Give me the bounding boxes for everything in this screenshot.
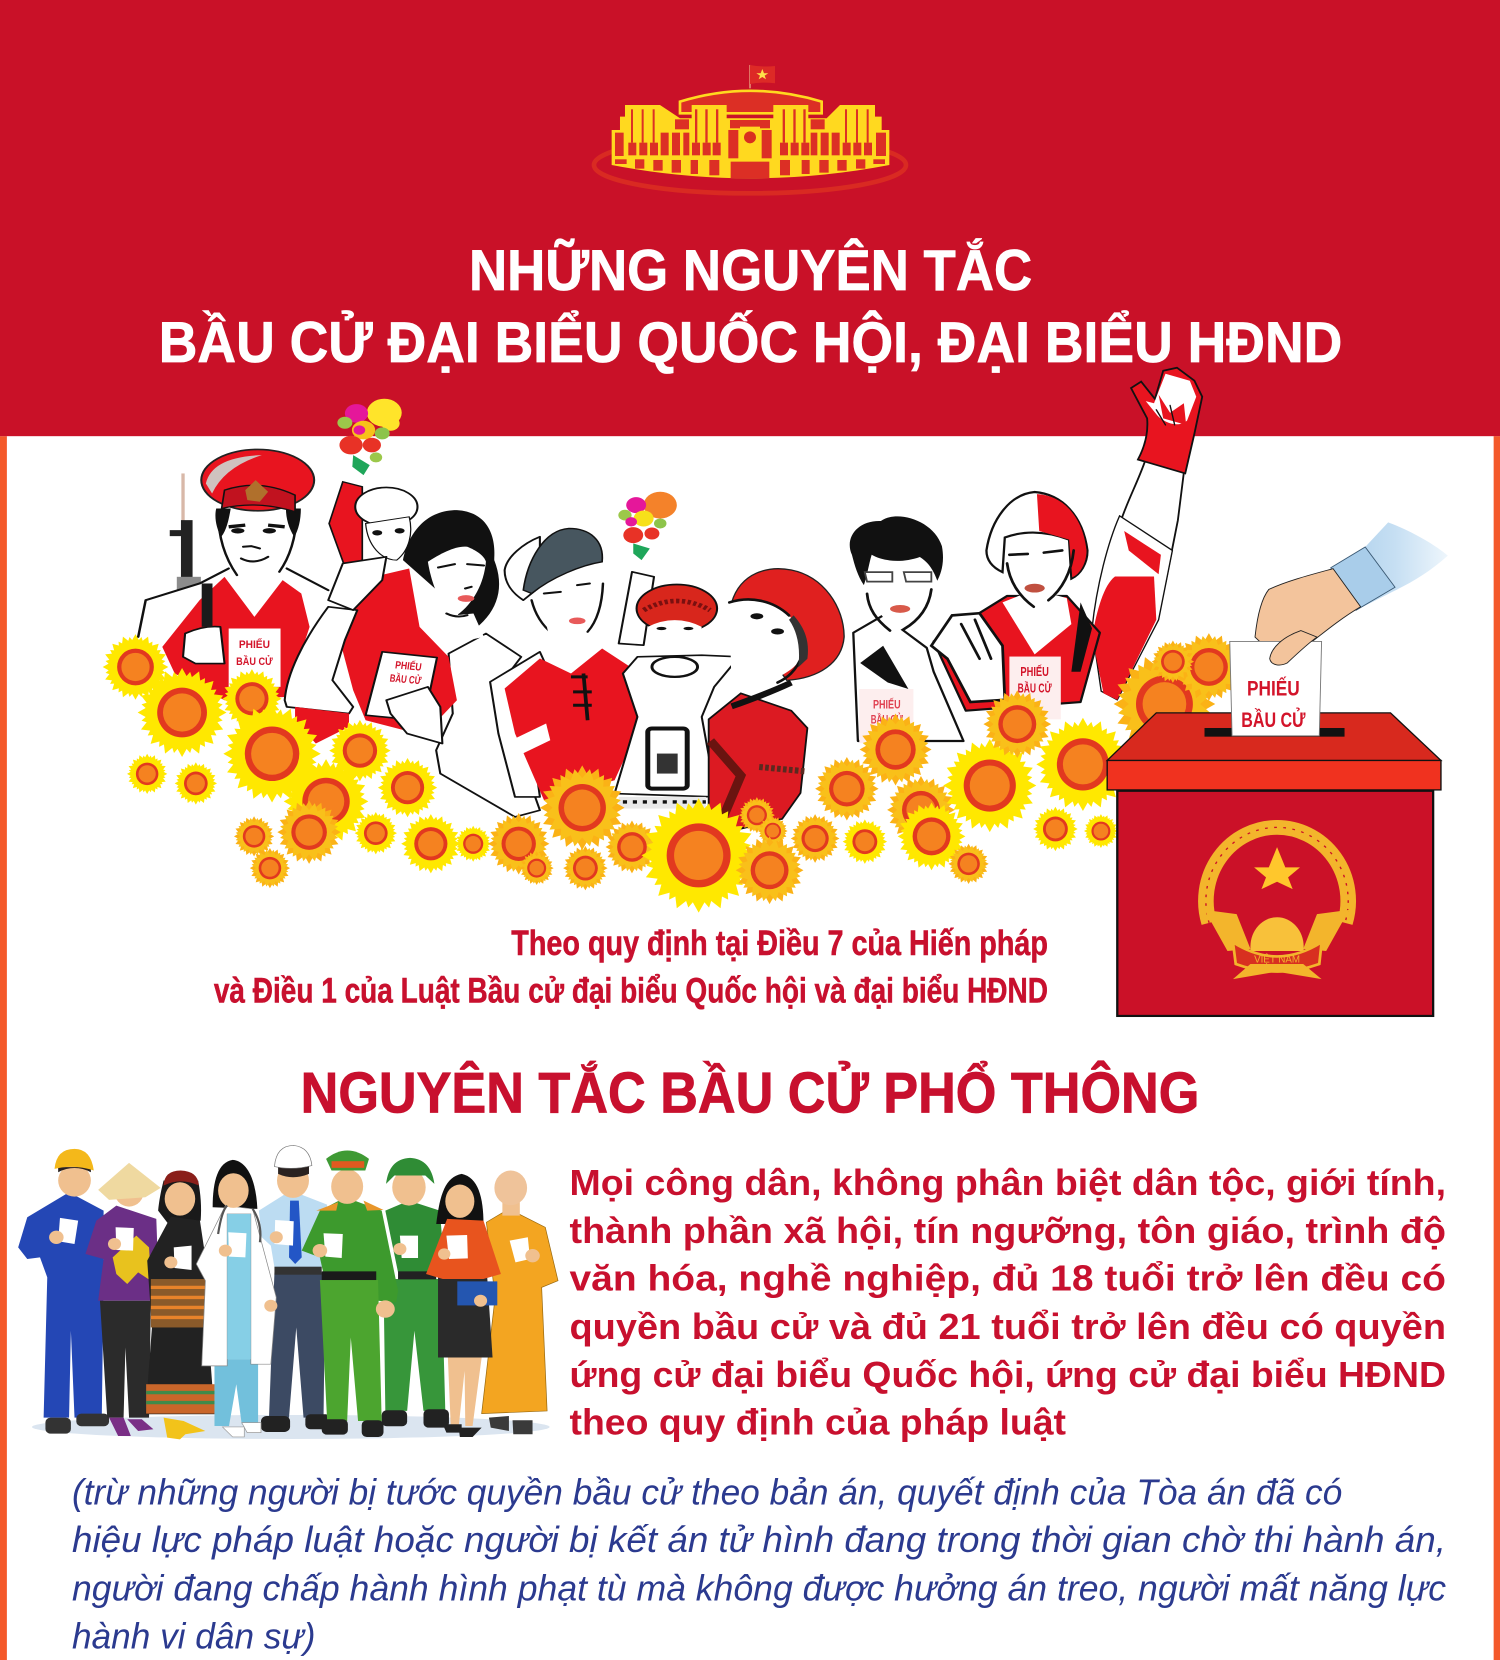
man in grey hat bbox=[490, 528, 637, 800]
note line 4: hành vi dân sự) bbox=[72, 1615, 315, 1656]
bouquet bbox=[618, 492, 677, 560]
hand bbox=[1255, 522, 1448, 641]
line 1: Mọi công dân, không phân biệt dân tộc, giới tính, bbox=[570, 1162, 1446, 1203]
woman carrying child: PHIẾU bbox=[394, 658, 423, 673]
title bbox=[159, 238, 1342, 375]
line 6: theo quy định của pháp luật bbox=[570, 1402, 1066, 1443]
soldier bbox=[138, 449, 328, 700]
header band bbox=[0, 0, 1500, 436]
principle description bbox=[570, 1162, 1446, 1443]
illustration: nine citizens from different occupations bbox=[18, 1145, 558, 1439]
woman carrying child bbox=[285, 482, 540, 817]
illustration: raised glove bbox=[1131, 368, 1202, 473]
icon: National Assembly building logo bbox=[594, 65, 906, 193]
subtitle line 1: Theo quy định tại Điều 7 của Hiến pháp bbox=[511, 924, 1048, 963]
man with glasses bbox=[850, 516, 963, 743]
child in red headscarf bbox=[615, 572, 739, 809]
woman in orange shirt bbox=[426, 1174, 501, 1437]
icon: national emblem: VIỆT NAM bbox=[1254, 953, 1300, 966]
worker in helmet raising hand: BẦU CỬ bbox=[1018, 681, 1052, 695]
bouquet bbox=[337, 399, 402, 475]
title line 1: NHỮNG NGUYÊN TẮC bbox=[469, 238, 1032, 303]
note line 1: (trừ những người bị tước quyền bầu cử theo bản án, quyết định của Tòa án đã có bbox=[72, 1471, 1342, 1512]
subtitle line 2: và Điều 1 của Luật Bầu cử đại biểu Quốc hội và đại biểu HĐND bbox=[214, 972, 1048, 1011]
box body bbox=[1117, 791, 1433, 1016]
line 2: thành phần xã hội, tín ngưỡng, tôn giáo, trình độ bbox=[570, 1210, 1446, 1251]
monk bbox=[482, 1171, 558, 1434]
woman in ethnic costume bbox=[145, 1171, 214, 1439]
thumb bbox=[1270, 631, 1317, 665]
exception note bbox=[72, 1471, 1446, 1656]
icon: national emblem bbox=[1205, 827, 1349, 979]
icon: flag bbox=[750, 65, 775, 88]
officer's colleague: soldier bbox=[382, 1158, 449, 1428]
line 5: ứng cử đại biểu Quốc hội, ứng cử đại biểu HĐND bbox=[570, 1354, 1446, 1395]
man with glasses: BẦU CỬ bbox=[871, 712, 903, 727]
engineer bbox=[259, 1145, 331, 1432]
child on shoulders bbox=[329, 482, 457, 735]
ballot box and voting hand bbox=[1107, 522, 1448, 1016]
section heading: NGUYÊN TẮC BẦU CỬ PHỔ THÔNG bbox=[301, 1061, 1199, 1126]
ballot paper: PHIẾU bbox=[1247, 676, 1300, 700]
note line 2: hiệu lực pháp luật hoặc người bị kết án tử hình đang trong thời gian chờ thi hành án, bbox=[72, 1519, 1446, 1560]
illustration: citizens, left group bbox=[138, 399, 739, 817]
officer bbox=[302, 1150, 398, 1437]
worker in helmet raising hand: PHIẾU bbox=[1020, 664, 1049, 679]
doctor bbox=[196, 1160, 277, 1437]
worker in helmet raising hand bbox=[931, 462, 1184, 719]
soldier: BẦU CỬ bbox=[236, 655, 273, 668]
illustration: citizens, right group bbox=[709, 462, 1184, 836]
woman carrying child: BẦU CỬ bbox=[389, 671, 422, 687]
sunflowers bbox=[100, 630, 1246, 918]
ground shadow bbox=[32, 1415, 550, 1439]
worker in blue bbox=[18, 1149, 109, 1434]
right orange border bbox=[1494, 436, 1500, 1660]
man with glasses: PHIẾU bbox=[873, 697, 901, 711]
line 3: văn hóa, nghề nghiệp, đủ 18 tuổi trở lên đều có bbox=[570, 1258, 1446, 1299]
soldier: PHIẾU bbox=[239, 637, 270, 651]
subtitle bbox=[214, 924, 1048, 1011]
title line 2: BẦU CỬ ĐẠI BIỂU QUỐC HỘI, ĐẠI BIỂU HĐND bbox=[159, 310, 1342, 375]
ballot paper: BẦU CỬ bbox=[1241, 708, 1306, 732]
note line 3: người đang chấp hành hình phạt tù mà không được hưởng án treo, người mất năng lực bbox=[72, 1568, 1446, 1609]
line 4: quyền bầu cử và đủ 21 tuổi trở lên đều có quyền bbox=[570, 1306, 1446, 1347]
left orange border bbox=[0, 436, 7, 1660]
ballot paper bbox=[1230, 641, 1322, 736]
woman in red hat bbox=[709, 569, 844, 836]
box lid bbox=[1107, 713, 1441, 790]
farmer bbox=[85, 1163, 161, 1436]
